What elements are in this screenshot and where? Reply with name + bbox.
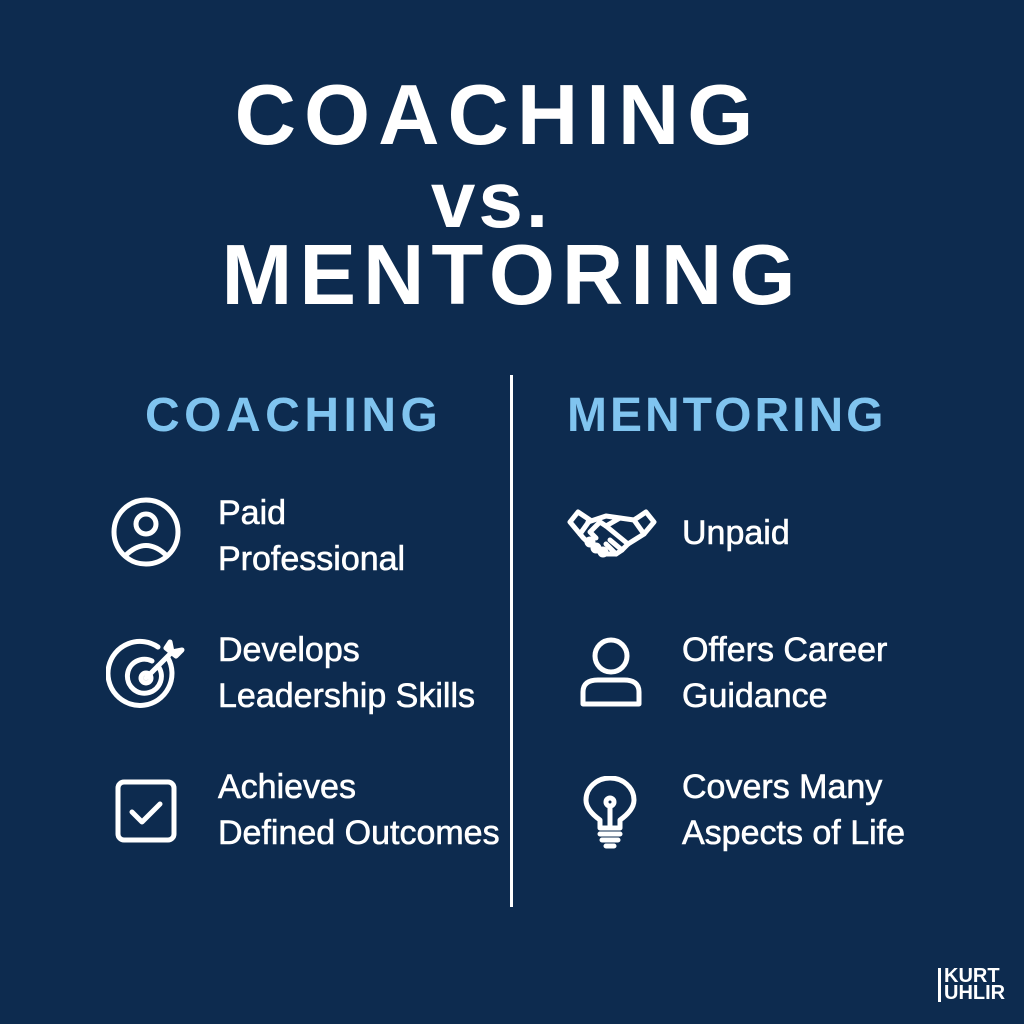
text: offers career guidance: [682, 631, 888, 715]
text: offers career guidance: Offers Career: [682, 631, 887, 669]
text: paid professional: Paid: [218, 494, 286, 532]
text: develops leadership skills: Develops: [218, 631, 360, 669]
text: unpaid: Unpaid: [682, 514, 790, 552]
text: covers many aspects of life: Covers Many: [682, 768, 882, 806]
text: achieves defined outcomes: Defined Outcomes: [218, 814, 500, 852]
title: coaching: COACHING: [235, 68, 761, 163]
icon: person: [580, 638, 642, 706]
text: covers many aspects of life: [682, 768, 905, 852]
logo: kurt uhlir: UHLIR: [944, 982, 1005, 1004]
text: achieves defined outcomes: Achieves: [218, 768, 356, 806]
heading: mentoring: MENTORING: [567, 389, 886, 442]
icon: checkbox: [116, 780, 176, 842]
text: paid professional: [218, 494, 405, 578]
text: develops leadership skills: Leadership Skills: [218, 677, 475, 715]
logo: kurt uhlir: KURT: [944, 965, 1000, 987]
title: mentoring: MENTORING: [222, 228, 802, 323]
icon: target: [106, 638, 184, 708]
icon: lightbulb: [584, 776, 636, 848]
icon: person circle: [112, 498, 180, 566]
text: offers career guidance: Guidance: [682, 677, 828, 715]
text: paid professional: Professional: [218, 540, 405, 578]
text: covers many aspects of life: Aspects of Life: [682, 814, 905, 852]
heading: coaching: COACHING: [145, 389, 442, 442]
text: achieves defined outcomes: [218, 768, 500, 852]
divider: [510, 375, 513, 907]
title: vs.: vs.: [431, 155, 551, 244]
icon: handshake: [567, 509, 657, 558]
text: develops leadership skills: [218, 631, 475, 715]
logo: kurt uhlir: [938, 968, 1005, 1002]
